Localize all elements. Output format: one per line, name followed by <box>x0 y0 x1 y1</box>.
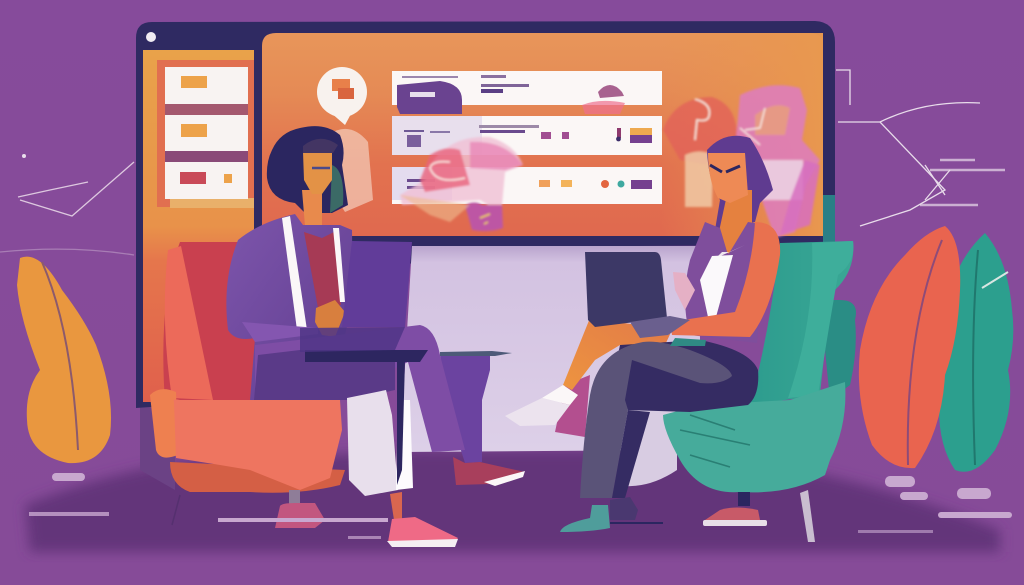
low white block <box>623 410 677 486</box>
grey leg <box>580 342 732 498</box>
shirt <box>304 232 341 308</box>
hair <box>267 126 348 213</box>
left laptop <box>300 241 412 352</box>
pink leg piece <box>555 375 590 437</box>
face <box>303 152 332 194</box>
legs <box>255 325 465 452</box>
side panel <box>143 32 254 402</box>
arm <box>670 222 780 337</box>
dark thigh <box>617 340 758 412</box>
back leg <box>440 352 490 463</box>
dashboard row 3 <box>392 167 662 204</box>
orange leg <box>563 318 672 390</box>
dashboard row 2 <box>392 116 662 155</box>
floor lines <box>218 518 388 539</box>
left graph <box>0 154 134 255</box>
wall under screen <box>400 246 700 452</box>
neck <box>302 190 322 238</box>
left plant <box>17 257 111 516</box>
left table <box>305 350 512 485</box>
teal shoe <box>560 505 610 532</box>
white pants lower <box>347 390 398 496</box>
lower dark leg <box>612 410 650 498</box>
hair <box>707 136 773 230</box>
vest <box>685 222 767 343</box>
left person <box>226 126 525 547</box>
right laptop <box>585 252 706 346</box>
neck <box>715 190 752 255</box>
right person <box>505 136 780 532</box>
overlapping pink blob <box>400 137 523 231</box>
lapel stripes <box>282 216 307 330</box>
face <box>708 153 748 203</box>
jacket <box>226 214 353 400</box>
forearm <box>242 322 318 342</box>
right armchair <box>663 241 856 542</box>
main screen <box>262 33 823 236</box>
chat bubble icon <box>317 67 373 212</box>
sock <box>542 385 578 405</box>
dashboard row 1 <box>392 71 662 114</box>
hands <box>315 300 345 337</box>
right green plant <box>939 233 1013 472</box>
small floor labels right <box>858 476 1012 533</box>
ankle <box>390 492 402 520</box>
floor shadow <box>25 400 1000 552</box>
right red plant <box>859 226 960 468</box>
monitor <box>136 21 835 408</box>
pink decorations right <box>663 85 820 238</box>
white shoe <box>505 398 570 426</box>
shoes <box>453 457 525 485</box>
left armchair <box>150 242 345 528</box>
right graph <box>836 70 1005 226</box>
